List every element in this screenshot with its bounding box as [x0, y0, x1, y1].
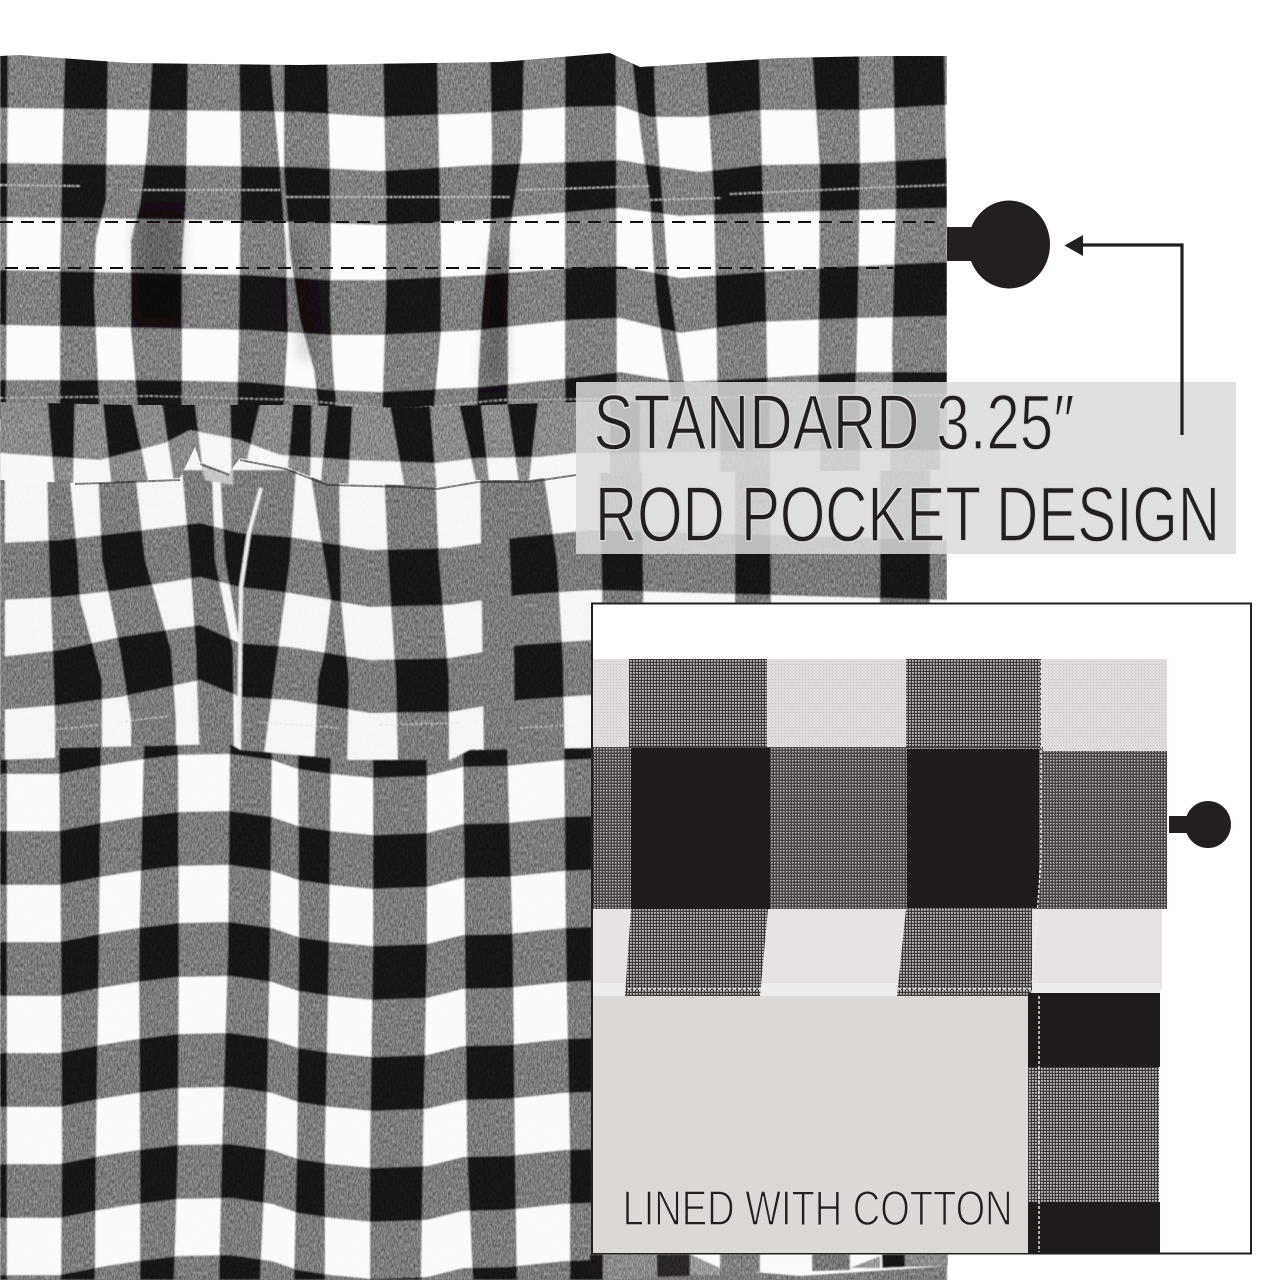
seams: [593, 660, 1160, 1252]
panel: ruffle frill: [0, 400, 947, 487]
panel: top curtain header: [0, 40, 947, 420]
right fold white cell top: [1043, 659, 1167, 751]
panel: lining inset: [592, 604, 1251, 1254]
rod pocket dashed lines: [0, 222, 935, 268]
arrow: pointing to rod: [1064, 235, 1182, 435]
fold highlight: [239, 488, 261, 742]
frill gray bands: [0, 395, 947, 490]
ruffle hem stitch: [50, 716, 570, 730]
panel: bottom curtain fabric: [0, 700, 948, 1280]
callout: rod pocket label: [576, 378, 1236, 558]
bottom strip beneath inset: [590, 1254, 948, 1280]
frill black checks: [47, 400, 940, 464]
ruffle seam stitch: [0, 395, 947, 410]
top row gray checks: [629, 659, 767, 747]
header stitch line: [0, 185, 947, 200]
fold shading: [135, 215, 506, 380]
lower gray checks: [625, 909, 768, 996]
ruffle tier bands: [0, 430, 947, 770]
hem strip: [593, 983, 1162, 996]
bottom curtain gray bands: [0, 700, 947, 1280]
inset fabric photo: [593, 659, 1167, 1253]
header black checks: [0, 50, 947, 420]
lower right black stripe top: [1028, 993, 1160, 1067]
lining fabric: [593, 996, 1029, 1253]
icon: small rod end: [1169, 801, 1231, 848]
lower right black stripe bottom: [1028, 1202, 1160, 1253]
panel: ruffle tier: [0, 430, 947, 770]
header gray bands: [0, 40, 947, 420]
lower right gray stripe: [1028, 1067, 1159, 1202]
lower white row: [593, 909, 1162, 989]
bottom curtain black checks: [0, 740, 592, 1280]
frill shadow line: [75, 460, 576, 489]
icon: curtain rod end: [947, 200, 1050, 288]
heading line one: STANDARD 3.25″: [594, 378, 1074, 466]
black check right: [907, 749, 1039, 908]
tucked fold patch behind frill: [200, 462, 234, 486]
middle row gray band: [593, 747, 1167, 909]
fabric weave texture: [0, 50, 947, 1280]
caption: lined with cotton: LINED WITH COTTON: [623, 1182, 1013, 1236]
black check left: [631, 748, 770, 909]
